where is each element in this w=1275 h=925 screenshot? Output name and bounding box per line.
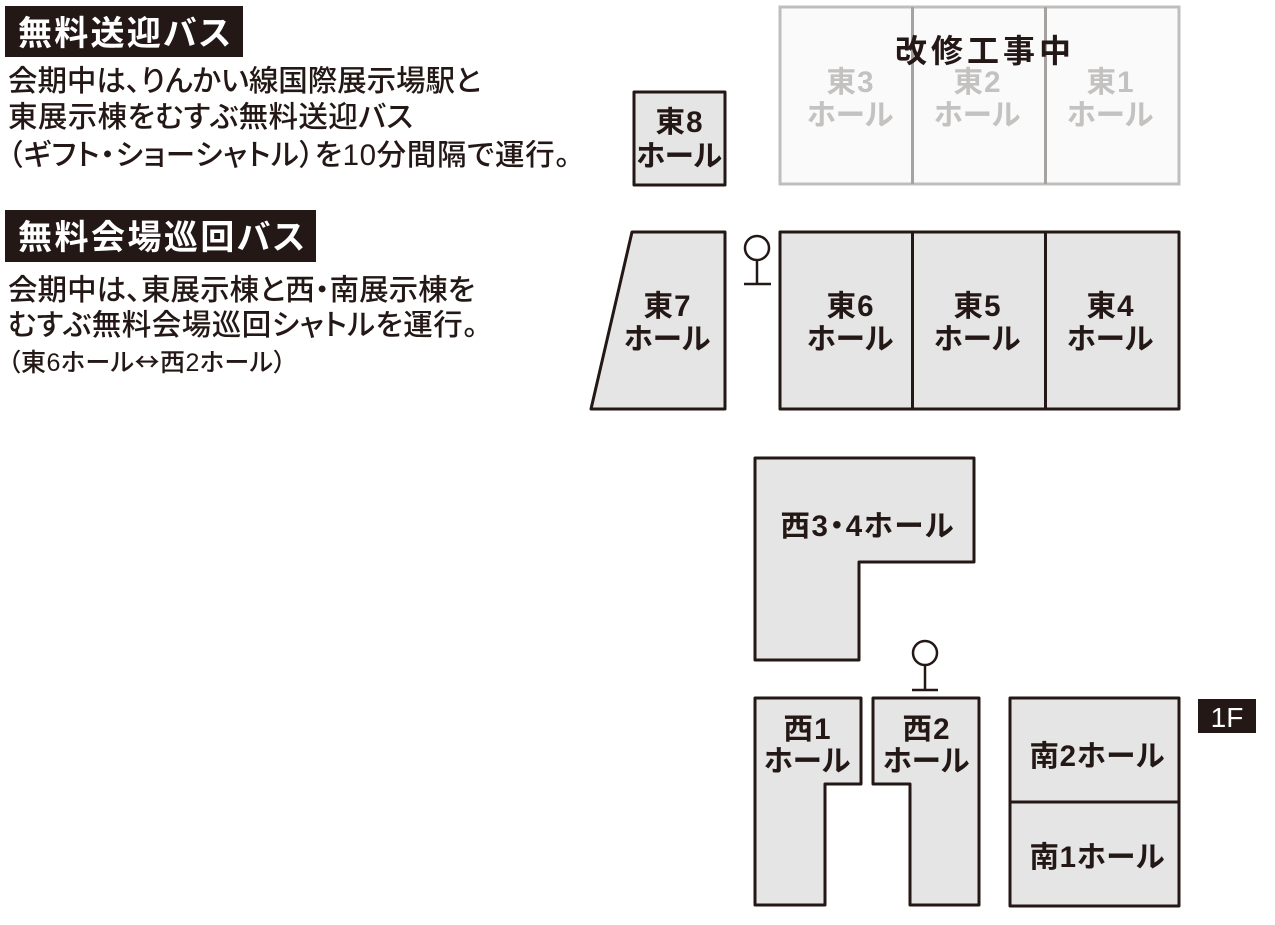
halls: East 4-6: 東4 — [1086, 290, 1134, 323]
label: floor 1F: 1F — [1211, 702, 1243, 733]
halls under construction: East 1-3: ホール — [807, 99, 893, 132]
halls: South 1-2: 南1ホール — [1030, 841, 1164, 874]
heading: free venue circulation bus: 無料会場巡回バス — [18, 219, 305, 257]
hall: East 7 — [591, 232, 725, 409]
text block: circulation bus description: （東6ホール↔西2ホール） — [8, 343, 286, 379]
icon: bus stop east — [744, 236, 771, 284]
hall: West 1 — [755, 698, 861, 905]
hall: West 2: 西2 — [902, 713, 950, 746]
hall: West 2: ホール — [883, 745, 969, 778]
text block: circulation bus description: むすぶ無料会場巡回シャトルを運行。 — [8, 309, 478, 342]
text block: circulation bus description — [8, 274, 478, 379]
hall: East 8: 東8 — [656, 106, 702, 139]
hall: West 3-4: 西3・4ホール — [780, 510, 954, 543]
label: floor 1F — [1198, 699, 1256, 733]
halls: East 4-6: ホール — [807, 323, 893, 356]
label: under construction: 改修工事中 — [895, 33, 1071, 69]
heading: free venue circulation bus — [5, 210, 316, 262]
halls under construction: East 1-3: ホール — [1067, 99, 1153, 132]
hall: West 1: 西1 — [784, 713, 830, 746]
halls: South 1-2: 南2ホール — [1030, 740, 1164, 773]
icon: bus stop west — [912, 641, 938, 690]
hall: East 7: 東7 — [644, 290, 690, 323]
halls: East 4-6: ホール — [934, 323, 1020, 356]
halls under construction: East 1-3: 東2 — [954, 66, 1000, 99]
hall: West 1: ホール — [764, 745, 850, 778]
halls: East 4-6: ホール — [1067, 323, 1153, 356]
text block: free shuttle bus description — [8, 65, 570, 172]
hall: East 7: ホール — [624, 323, 710, 356]
text block: circulation bus description: 会期中は、東展示棟と西・南展示棟を — [8, 274, 475, 307]
halls under construction: East 1-3: 東3 — [826, 66, 874, 99]
halls: East 4-6: 東5 — [954, 290, 1000, 323]
hall: West 3-4 — [755, 458, 974, 660]
hall: East 8: ホール — [636, 140, 722, 173]
halls under construction: East 1-3 — [780, 7, 1179, 184]
halls: East 4-6 — [780, 232, 1179, 409]
heading: free shuttle bus: 無料送迎バス — [18, 15, 231, 53]
hall: East 8 — [634, 92, 725, 185]
text block: free shuttle bus description: 会期中は、りんかい線国際展示場駅と — [8, 65, 481, 98]
halls under construction: East 1-3: ホール — [934, 99, 1020, 132]
halls: East 4-6: 東6 — [826, 290, 874, 323]
halls: South 1-2 — [1010, 698, 1179, 906]
text block: free shuttle bus description: （ギフト・ショーシャトル）を10分間隔で運行。 — [8, 139, 570, 172]
text block: free shuttle bus description: 東展示棟をむすぶ無料送迎バス — [8, 101, 413, 134]
hall: West 2 — [873, 698, 979, 905]
halls under construction: East 1-3: 東1 — [1086, 66, 1134, 99]
heading: free shuttle bus — [5, 6, 243, 57]
